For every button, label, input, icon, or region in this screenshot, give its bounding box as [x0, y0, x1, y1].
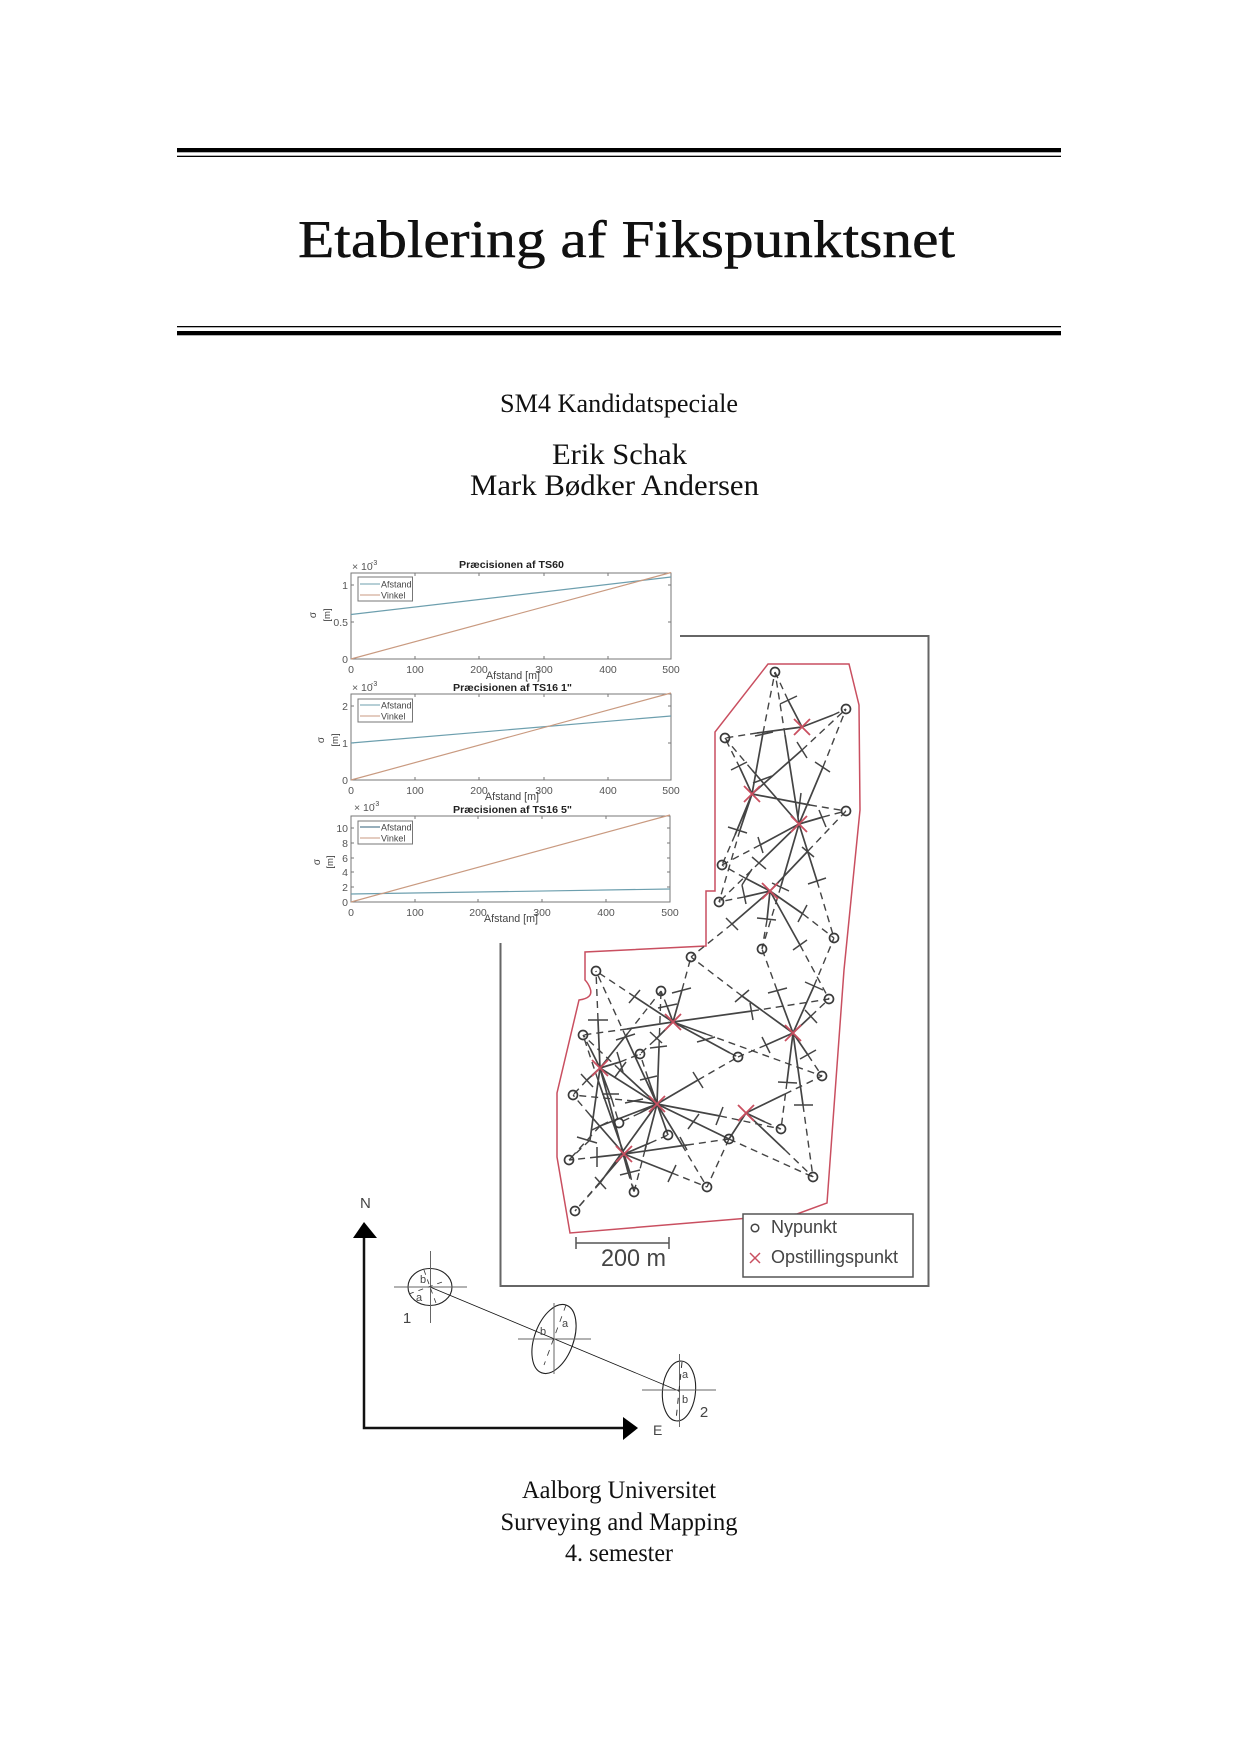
institution block: 4. semester — [565, 1540, 674, 1567]
chart: Præcisionen af TS16 5": 10 — [336, 823, 348, 835]
chart: Præcisionen af TS16 1": 2 — [342, 701, 348, 713]
chart: Præcisionen af TS16 1": Afstand [m] — [485, 791, 539, 803]
chart: Præcisionen af TS16 1": -3 — [371, 681, 377, 688]
error ellipse 1: 1 — [403, 1310, 411, 1327]
chart: Præcisionen af TS16 1" — [316, 681, 680, 803]
map legend: Nypunkt — [771, 1217, 837, 1237]
map legend — [743, 1214, 913, 1277]
authors — [470, 438, 759, 502]
chart: Præcisionen af TS16 5": 100 — [406, 907, 424, 919]
chart: Præcisionen af TS16 5": 0 — [342, 897, 348, 909]
site boundary — [557, 664, 860, 1233]
chart: Præcisionen af TS60: -3 — [371, 560, 377, 567]
chart: Præcisionen af TS16 1": [m] — [330, 733, 341, 747]
error ellipse 2 — [518, 1299, 591, 1379]
chart title: TS60: Præcisionen af TS60 — [459, 559, 564, 571]
title: Etablering af Fikspunktsnet — [298, 211, 955, 269]
legend — [358, 577, 412, 601]
scale bar: 200 m — [601, 1245, 666, 1272]
chart: Præcisionen af TS60: 200 — [470, 664, 488, 676]
authors: Mark Bødker Andersen — [470, 469, 759, 502]
network: station points — [592, 719, 810, 1162]
chart: Præcisionen af TS16 1": 0 — [342, 775, 348, 787]
legend: Afstand — [381, 700, 412, 710]
chart: Præcisionen af TS16 5": Afstand [m] — [484, 913, 538, 925]
institution block: Aalborg Universitet — [522, 1477, 716, 1504]
legend — [358, 699, 412, 722]
chart: Præcisionen af TS60: σ — [308, 611, 319, 618]
map legend: Opstillingspunkt — [771, 1247, 898, 1267]
legend: Vinkel — [381, 590, 405, 600]
chart: Præcisionen af TS16 1": 400 — [599, 785, 617, 797]
chart: Præcisionen af TS60: 0 — [342, 654, 348, 666]
subtitle: SM4 Kandidatspeciale — [500, 389, 738, 418]
error ellipse 3 — [642, 1354, 716, 1427]
chart: Præcisionen af TS16 1": σ — [316, 736, 327, 743]
chart title: TS16 1": Præcisionen af TS16 1" — [453, 682, 572, 694]
chart: Præcisionen af TS16 5": 400 — [597, 907, 615, 919]
error ellipse 3: a — [682, 1369, 689, 1381]
bottom double rule — [177, 326, 1061, 335]
legend: Afstand — [381, 580, 412, 590]
north-east axes: N — [360, 1195, 371, 1212]
chart: Præcisionen af TS60: 500 — [662, 664, 680, 676]
network: observation lines — [569, 672, 846, 1211]
chart: Præcisionen af TS60: × 10 — [352, 561, 373, 573]
map frame — [500, 636, 928, 1286]
chart: Præcisionen af TS16 1": 300 — [535, 785, 553, 797]
chart: Præcisionen af TS16 1": 500 — [662, 785, 680, 797]
chart: Præcisionen af TS16 5": [m] — [325, 855, 336, 869]
dashed line segments — [569, 672, 846, 1211]
arrow: north — [353, 1222, 377, 1238]
chart: Præcisionen af TS16 5": × 10 — [354, 802, 375, 814]
legend: Vinkel — [381, 712, 405, 722]
chart: Præcisionen af TS60: Afstand [m] — [486, 670, 540, 682]
chart: Præcisionen af TS16 1": 0 — [348, 785, 354, 797]
chart: Præcisionen af TS16 5": 0 — [348, 907, 354, 919]
chart: Præcisionen af TS60: 300 — [535, 664, 553, 676]
institution block — [500, 1477, 738, 1567]
chart: Præcisionen af TS16 5": 300 — [533, 907, 551, 919]
chart: Præcisionen af TS60: 400 — [599, 664, 617, 676]
solid line segments — [587, 700, 833, 1183]
icon: new point — [751, 1224, 759, 1232]
chart title: TS16 5": Præcisionen af TS16 5" — [453, 804, 572, 816]
error ellipse diagram — [394, 1251, 716, 1427]
chart: Præcisionen af TS16 1": 1 — [342, 738, 348, 750]
error ellipse 2: b — [540, 1326, 546, 1338]
chart: Præcisionen af TS16 5": -3 — [373, 801, 379, 808]
error ellipse 1 — [394, 1251, 467, 1327]
chart: Præcisionen af TS16 1": × 10 — [352, 682, 373, 694]
legend: Afstand — [381, 822, 412, 832]
chart: Præcisionen af TS60: 100 — [406, 664, 424, 676]
chart: Præcisionen af TS16 5": 6 — [342, 853, 348, 865]
top double rule — [177, 148, 1061, 157]
icon: station point — [750, 1253, 760, 1263]
error ellipse 2: a — [562, 1318, 569, 1330]
chart: Præcisionen af TS16 5": 4 — [342, 867, 348, 879]
chart: Præcisionen af TS60: [m] — [322, 608, 333, 622]
chart: Præcisionen af TS60 — [308, 559, 680, 682]
chart: Præcisionen af TS16 5": σ — [312, 858, 323, 865]
arrow: east — [623, 1417, 638, 1440]
chart: Præcisionen af TS16 5": 200 — [469, 907, 487, 919]
error ellipse 1: a — [416, 1292, 423, 1304]
network: new points — [564, 668, 850, 1216]
institution block: Surveying and Mapping — [500, 1509, 738, 1536]
chart: Præcisionen af TS60: 0.5 — [333, 617, 348, 629]
legend: Vinkel — [381, 834, 405, 844]
error ellipse 3: 2 — [700, 1404, 708, 1421]
chart: Præcisionen af TS60: 1 — [342, 580, 348, 592]
legend — [358, 821, 412, 844]
chart: Præcisionen af TS16 5": 500 — [661, 907, 679, 919]
chart: Præcisionen af TS16 5": 8 — [342, 838, 348, 850]
chart: Præcisionen af TS16 5" — [312, 801, 679, 925]
north-east axes: E — [653, 1422, 662, 1438]
scale bar — [576, 1237, 669, 1272]
authors: Erik Schak — [552, 438, 687, 471]
chart: Præcisionen af TS60: 0 — [348, 664, 354, 676]
error ellipse 1: b — [420, 1274, 426, 1286]
north-east axes — [353, 1195, 662, 1440]
error ellipse 3: b — [682, 1394, 688, 1406]
chart: Præcisionen af TS16 5": 2 — [342, 882, 348, 894]
cross ticks — [577, 696, 830, 1189]
chart: Præcisionen af TS16 1": 200 — [470, 785, 488, 797]
chart: Præcisionen af TS16 1": 100 — [406, 785, 424, 797]
